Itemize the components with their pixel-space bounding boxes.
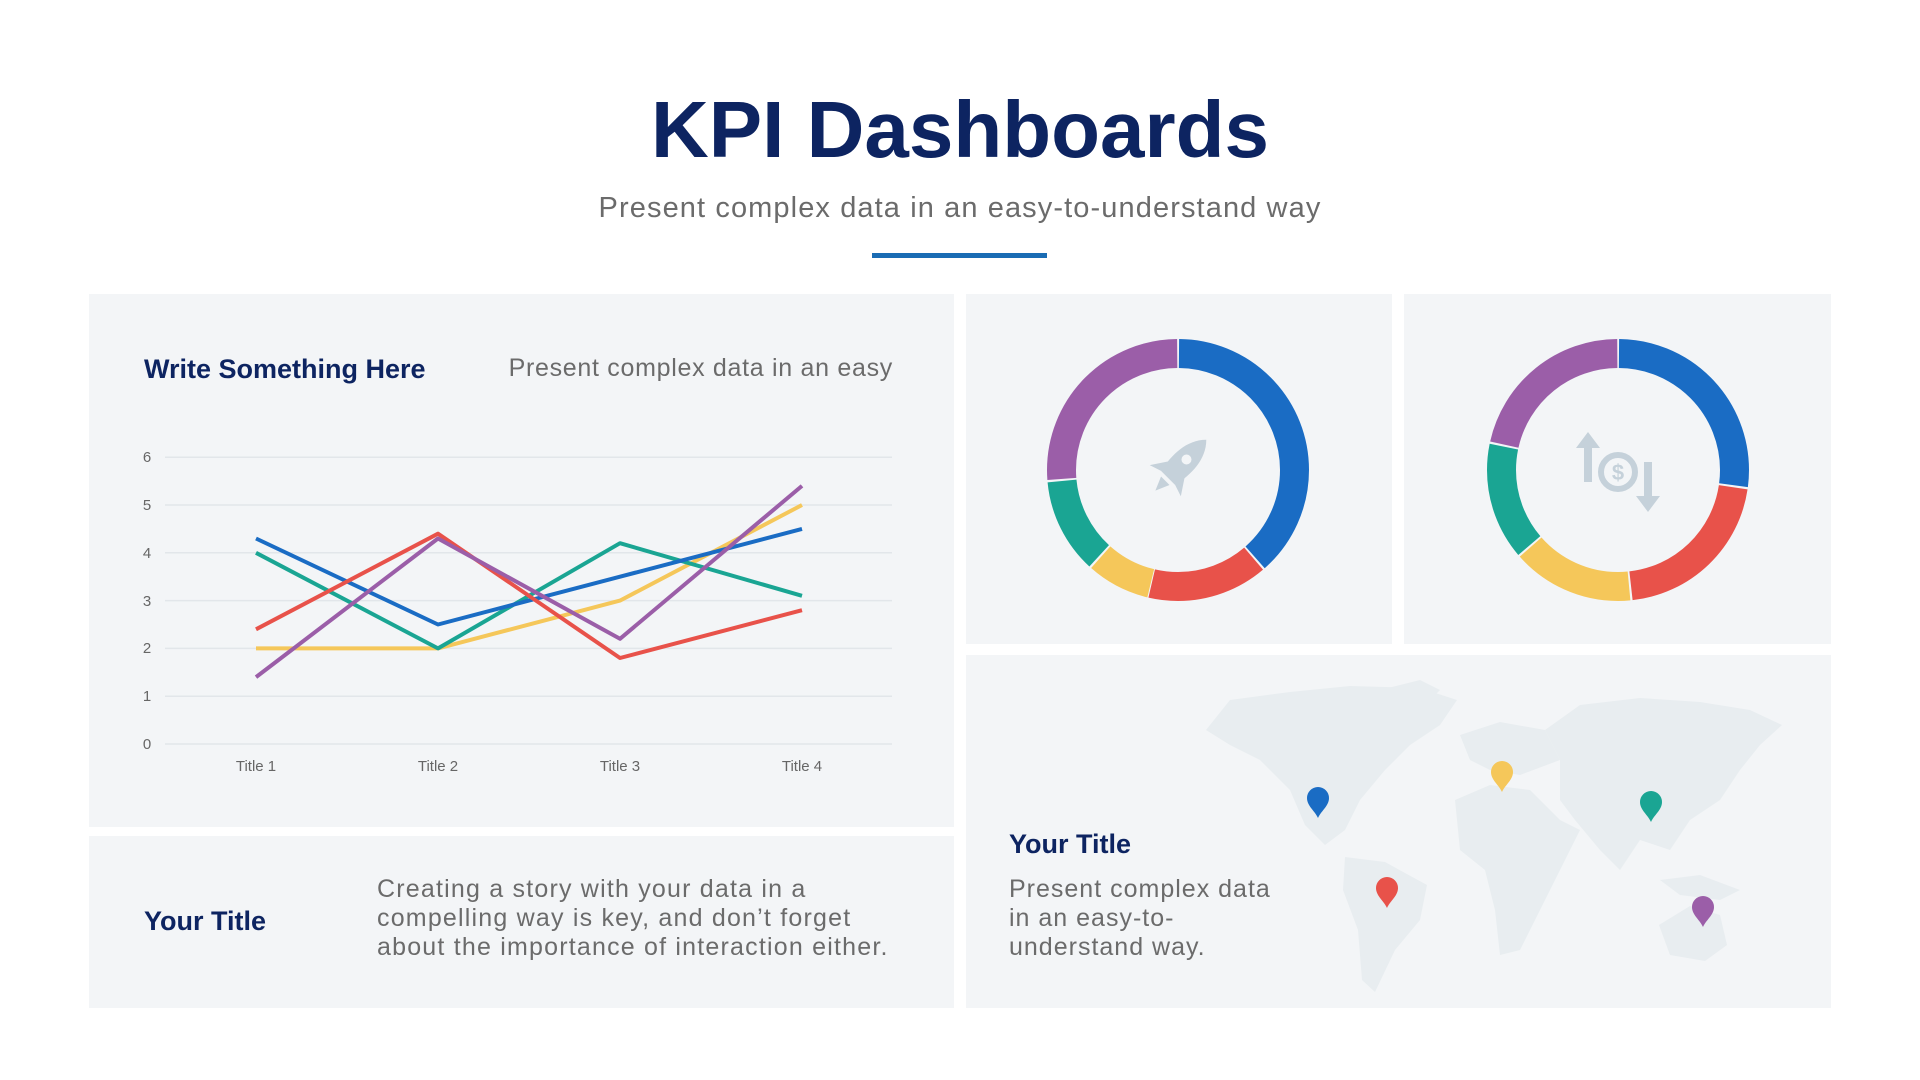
map text [1009, 875, 1271, 961]
line chart: Title 2 [418, 758, 458, 775]
line chart: Title 1 [236, 758, 276, 775]
map pins [1307, 761, 1714, 927]
line chart: 0 [143, 736, 151, 753]
line chart: 5 [143, 497, 151, 514]
map heading: Your Title [1009, 829, 1131, 859]
panel: line chart [89, 294, 954, 827]
line chart: 6 [143, 449, 151, 466]
chart subtext: Present complex data in an easy [509, 354, 893, 382]
subtitle: Present complex data in an easy-to-understand way [599, 192, 1321, 224]
body text [377, 875, 889, 961]
title underline [872, 253, 1047, 258]
heading: Your Title [144, 906, 266, 936]
line chart: 3 [143, 593, 151, 610]
line chart: 1 [143, 688, 151, 705]
chart heading: Write Something Here [144, 354, 426, 384]
body text: compelling way is key, and don’t forget [377, 904, 851, 932]
map text: in an easy-to- [1009, 904, 1174, 932]
donut chart 2 [1502, 354, 1734, 586]
icon: money arrows: $ [1612, 460, 1624, 485]
panel: map [966, 655, 1831, 1008]
line chart: 2 [143, 640, 151, 657]
panel: donut 1 [966, 294, 1392, 644]
line chart: 4 [143, 545, 151, 562]
icon: rocket [1140, 424, 1222, 506]
line chart: Title 4 [782, 758, 822, 775]
map text: Present complex data [1009, 875, 1271, 903]
icon: money arrows [1576, 432, 1660, 512]
title: KPI Dashboards [651, 85, 1269, 174]
body text: Creating a story with your data in a [377, 875, 807, 903]
body text: about the importance of interaction either. [377, 933, 889, 961]
line chart: Title 3 [600, 758, 640, 775]
panel: donut 2 [1404, 294, 1831, 644]
world map [1206, 680, 1782, 992]
donut chart 1 [1062, 354, 1294, 586]
panel: bottom left text [89, 836, 954, 1008]
map text: understand way. [1009, 933, 1206, 961]
